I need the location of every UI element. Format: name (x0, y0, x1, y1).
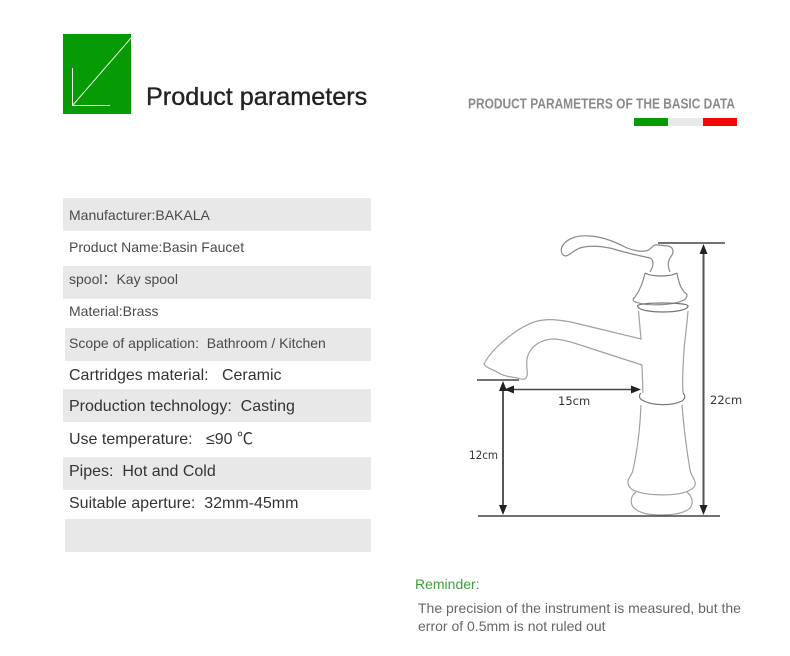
row: cartridges material: Cartridges material: Ceramic (69, 367, 282, 384)
row: scope of application (65, 328, 371, 361)
reminder text (418, 600, 741, 634)
dimension: spout height 12cm (469, 380, 519, 515)
row: product name: Product Name:Basin Faucet (69, 239, 244, 255)
row: pipes: Pipes: Hot and Cold (69, 463, 216, 480)
dimension: total height 22cm: 22cm (710, 393, 742, 407)
row: use temperature: Use temperature: ≤90 ℃ (69, 431, 253, 448)
title: Product parameters (146, 83, 367, 111)
row: material: Material:Brass (69, 303, 158, 319)
dimension: spout reach 15cm (504, 386, 641, 408)
dimension: total height 22cm (478, 243, 742, 516)
parameters table (63, 198, 371, 552)
row: production technology (63, 389, 371, 422)
dimension: spout reach 15cm: 15cm (558, 394, 590, 408)
faucet outline (484, 236, 695, 515)
row: manufacturer (63, 198, 371, 231)
row: empty (65, 519, 371, 552)
row: production technology: Production technology: Casting (69, 398, 295, 415)
icon: green square with arrow lines (63, 34, 131, 114)
dimension: spout height 12cm: 12cm (469, 448, 498, 462)
flag colour bar (634, 118, 737, 126)
reminder text: The precision of the instrument is measured, but the (418, 600, 741, 616)
reminder heading: Reminder: (415, 576, 480, 592)
row: spool: spool：Kay spool (69, 271, 178, 287)
reminder text: error of 0.5mm is not ruled out (418, 618, 606, 634)
row: pipes (63, 457, 371, 490)
row: scope of application: Scope of application: Bathroom / Kitchen (69, 335, 326, 351)
row: suitable aperture: Suitable aperture: 32mm-45mm (69, 495, 298, 512)
row: manufacturer: Manufacturer:BAKALA (69, 207, 210, 223)
row: spool (63, 266, 371, 299)
